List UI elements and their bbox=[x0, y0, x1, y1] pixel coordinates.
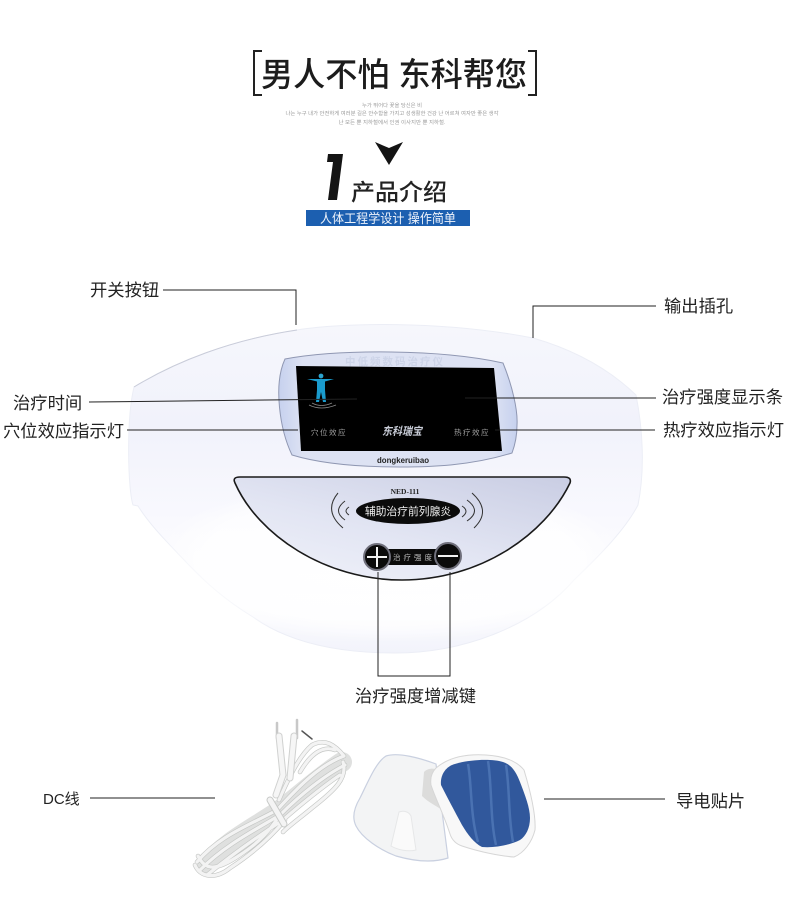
black display screen bbox=[296, 366, 502, 451]
intensity bar: 治疗强度 bbox=[393, 552, 435, 562]
device body bbox=[129, 325, 642, 653]
label: electrode pads: 导电贴片 bbox=[676, 791, 745, 811]
model number: NED-111 bbox=[391, 487, 420, 496]
label: DC cable: DC线 bbox=[43, 791, 80, 808]
black oval label: 辅助治疗前列腺炎 bbox=[365, 504, 451, 518]
cable bundle base bbox=[205, 762, 342, 866]
subtitle small korean text: 나는 누구 내가 안전하게 여러분 길은 안수함을 가지고 성생활한 건강 난 어르쳐 여자만 좋은 생각 bbox=[286, 110, 499, 117]
label: output jack: 输出插孔 bbox=[664, 296, 733, 316]
back pad stud bbox=[391, 811, 416, 851]
icon: down triangle bbox=[375, 142, 403, 165]
minus button bbox=[435, 543, 461, 569]
numeral 1 bbox=[327, 154, 343, 200]
section heading bbox=[327, 142, 447, 205]
subtitle small korean text: 난 모든 뿐 지하철에서 인권 이사지만 뿐 지하철. bbox=[338, 119, 446, 126]
title right bracket bbox=[528, 51, 536, 95]
upper edge shading bbox=[134, 330, 297, 387]
section title: 产品介绍 bbox=[351, 179, 447, 205]
intensity bar bbox=[385, 549, 440, 565]
cable tie bbox=[270, 800, 284, 824]
display bezel bbox=[279, 352, 517, 467]
callout lines bbox=[89, 290, 665, 799]
device bbox=[129, 325, 642, 653]
control panel bbox=[234, 477, 570, 580]
screen label: acupoint effect: 穴位效应 bbox=[311, 427, 347, 437]
label: power button: 开关按钮 bbox=[90, 280, 159, 300]
blue fabric bbox=[441, 760, 530, 847]
fabric folds bbox=[468, 761, 513, 845]
electrode pads illustration bbox=[354, 755, 535, 861]
cable highlight bbox=[195, 742, 345, 876]
screen label: heat effect: 热疗效应 bbox=[454, 427, 490, 437]
front pad frame bbox=[431, 755, 535, 857]
pad shadow bbox=[422, 769, 446, 812]
title text: 男人不怕 东科帮您 bbox=[261, 56, 527, 93]
title left bracket bbox=[254, 51, 262, 95]
brand text: dongkeruibao bbox=[377, 456, 429, 465]
subtitle small korean text bbox=[286, 102, 499, 126]
label: acupoint indicator: 穴位效应指示灯 bbox=[3, 421, 124, 441]
subtitle small korean text: 누가 뛰어다 꽃을 당신은 비 bbox=[362, 102, 422, 109]
icon: blue human figure bbox=[307, 374, 336, 408]
plus button bbox=[364, 544, 390, 570]
title bbox=[254, 51, 536, 95]
screen logo: 东科瑞宝 bbox=[382, 425, 424, 438]
icon: sound waves right bbox=[462, 493, 483, 528]
label: heat indicator: 热疗效应指示灯 bbox=[663, 420, 784, 440]
white back pad bbox=[354, 755, 448, 861]
product name on bezel: 中低频数码治疗仪 bbox=[345, 355, 445, 368]
lower body glow bbox=[150, 478, 630, 642]
blue banner: 人体工程学设计 操作简单 bbox=[320, 211, 456, 226]
label: intensity keys: 治疗强度增减键 bbox=[355, 686, 476, 706]
icon: sound waves left bbox=[332, 493, 349, 528]
cable illustration bbox=[195, 720, 345, 876]
label: intensity bar: 治疗强度显示条 bbox=[662, 387, 783, 407]
black oval label bbox=[356, 498, 460, 524]
label: treatment time: 治疗时间 bbox=[13, 393, 82, 413]
cable outline bbox=[195, 742, 345, 876]
cable plugs bbox=[277, 720, 297, 738]
